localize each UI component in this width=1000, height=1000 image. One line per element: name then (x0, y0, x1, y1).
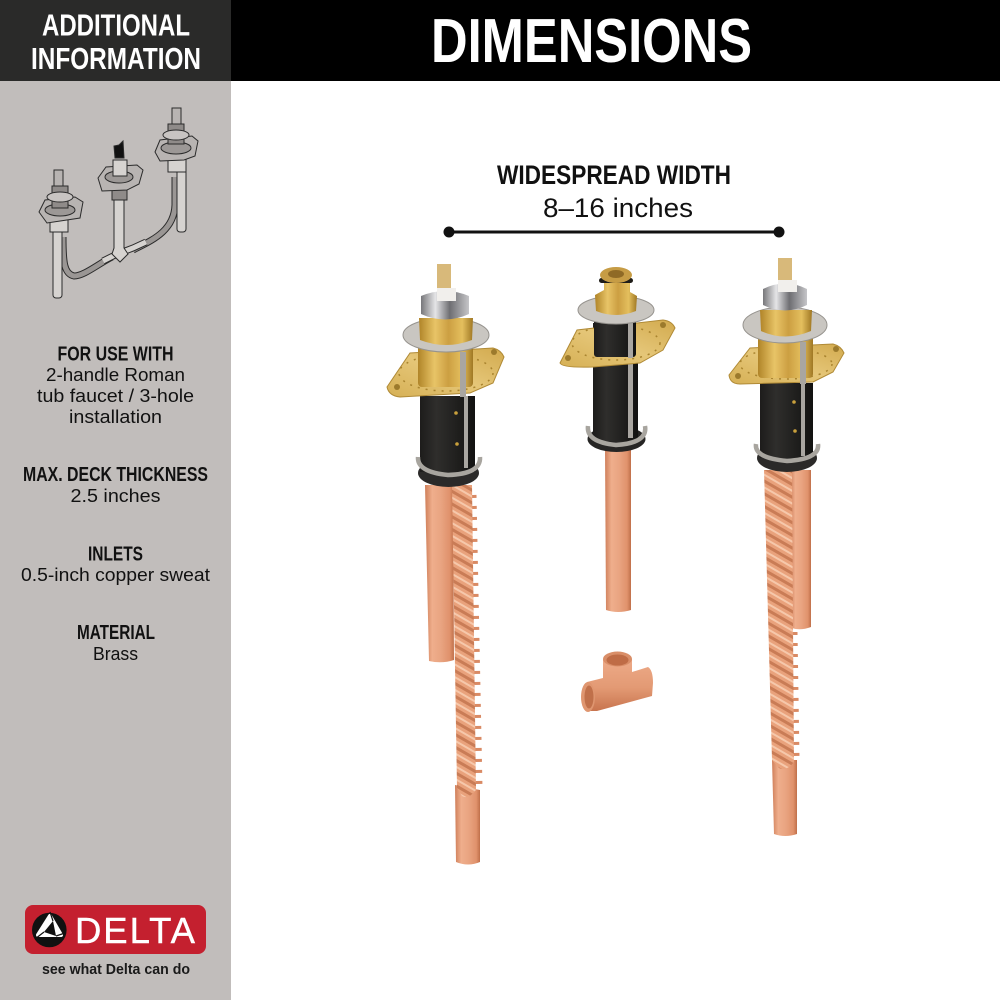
icon: right flange (155, 108, 198, 172)
icon: corrugated supply line (63, 177, 175, 276)
left valve flange (387, 348, 504, 397)
text block: for use with: tub faucet / 3-hole (37, 385, 194, 406)
middle valve upper rod (628, 322, 633, 358)
left valve gasket base (418, 459, 479, 487)
left valve ring (418, 457, 480, 475)
icon: valve line drawing (39, 108, 198, 298)
right valve brass body (758, 332, 813, 378)
copper tee fitting (581, 652, 653, 712)
sidebar panel (0, 81, 231, 1000)
left valve nut (419, 318, 473, 345)
left valve washer (403, 318, 489, 352)
header: dimensions (231, 0, 1000, 81)
dimension arrow (444, 226, 784, 238)
heading: widespread width (497, 160, 731, 223)
text block: max deck thickness (23, 464, 208, 506)
middle valve (560, 267, 675, 612)
right valve nut (760, 310, 812, 336)
icon: left pipe (53, 228, 62, 298)
right valve gasket base (757, 444, 817, 472)
middle valve brass fitting (595, 267, 637, 315)
right valve chrome ring (763, 284, 807, 310)
header: dimensions: DIMENSIONS (431, 7, 752, 76)
left valve brass body (418, 343, 473, 387)
middle valve copper pipe (605, 448, 631, 612)
text block: inlets (21, 544, 211, 585)
text block: material (77, 622, 155, 664)
middle valve ring (588, 426, 645, 445)
logo: Delta: DELTA (75, 910, 196, 951)
middle valve gasket base (588, 426, 646, 452)
left valve black sleeve (420, 396, 475, 472)
header: additional information: ADDITIONAL (42, 8, 190, 42)
left valve straight tube (455, 785, 480, 864)
icon: left flange (39, 170, 83, 232)
icon: middle pipe (112, 200, 128, 262)
right valve (729, 258, 844, 836)
right valve copper pipe (790, 470, 811, 629)
middle valve rod (628, 322, 633, 438)
icon: right pipe (177, 168, 186, 232)
text block: for use with: installation (69, 406, 162, 427)
left valve copper pipe (425, 485, 454, 662)
text block: for use with: 2-handle Roman (46, 364, 185, 385)
text block: material: Brass (93, 643, 138, 664)
middle valve flange (560, 320, 675, 367)
logo: Delta (25, 905, 206, 978)
right valve washer (743, 307, 827, 343)
text block: inlets: INLETS (88, 544, 143, 566)
right valve ring (756, 444, 818, 461)
logo: Delta: see what Delta can do (42, 961, 190, 978)
right valve spiral pipe (764, 470, 796, 769)
text block: inlets: 0.5-inch copper sweat (21, 564, 211, 585)
heading: widespread width: 8–16 inches (543, 193, 693, 223)
header: additional information (0, 0, 231, 81)
middle valve upper sleeve (594, 318, 636, 357)
left valve stem (437, 264, 456, 301)
icon: middle flange (98, 141, 143, 200)
text block: material: MATERIAL (77, 622, 155, 644)
middle valve black sleeve (593, 323, 638, 441)
left valve chrome ring (421, 291, 469, 320)
left valve (387, 264, 504, 864)
right valve rod (800, 342, 806, 384)
text block: max deck thickness: 2.5 inches (70, 485, 160, 506)
right valve flange (729, 344, 844, 384)
text block: for use with (37, 344, 194, 427)
left valve rod (460, 352, 466, 397)
left valve spiral pipe (452, 485, 479, 797)
header: additional information: INFORMATION (31, 42, 201, 76)
right valve straight tube (772, 760, 797, 836)
heading: widespread width: WIDESPREAD WIDTH (497, 160, 731, 190)
text block: for use with: FOR USE WITH (58, 344, 174, 366)
middle valve washer (578, 296, 654, 324)
right valve stem (778, 258, 797, 292)
right valve black sleeve (760, 383, 813, 458)
text block: max deck thickness: MAX. DECK THICKNESS (23, 464, 208, 486)
